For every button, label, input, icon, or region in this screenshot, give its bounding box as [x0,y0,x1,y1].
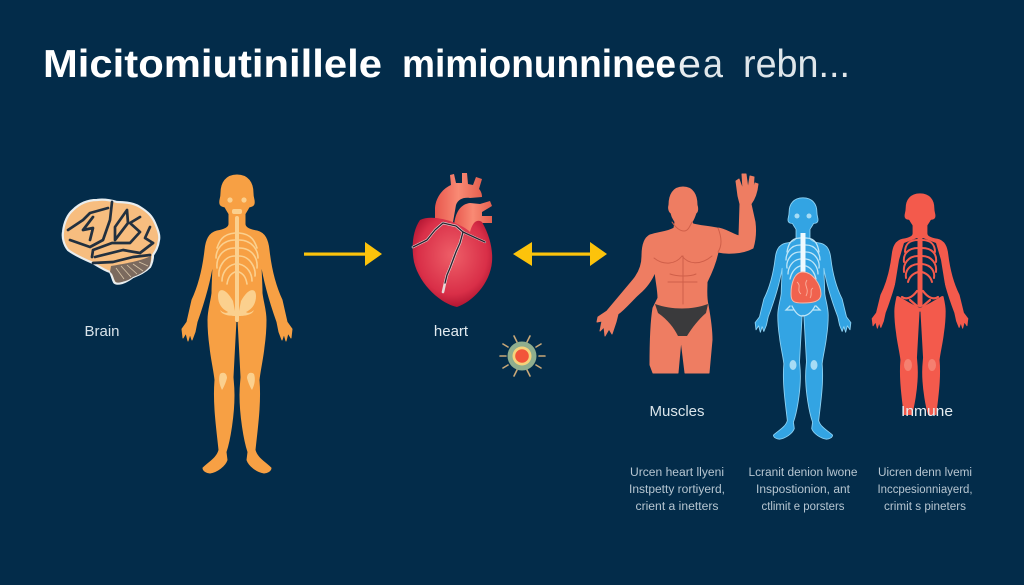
briefs [655,304,708,336]
title: e [678,43,701,86]
label: Brain: Brain [84,323,120,340]
figure: muscle man [597,174,758,373]
aorta [435,173,482,222]
label: heart: heart [434,323,469,340]
icon: brain [63,200,159,284]
blue ribs [786,238,820,316]
label: Muscles: Muscles [650,403,704,420]
text block: muscles description: Instpetty rortiyerd, [629,484,725,496]
orange skeleton [216,218,258,320]
text block: immune description: crimit s pineters [884,501,966,513]
label: Inmune: Inmune [901,403,953,420]
text block: muscles description [629,467,725,513]
cerebellum [110,256,151,283]
text block: blue figure description: ctlimit e porsters [762,501,845,513]
text block: muscles description: crient a inetters [636,501,719,513]
title: Micitomiutinillele [43,43,382,86]
text block: immune description: Uicren denn lvemi [878,467,972,479]
arrow: double [513,242,607,266]
text block: muscles description: Urcen heart llyeni [630,467,724,479]
icon: heart [413,173,492,307]
icon: cell sun [500,336,545,376]
title: mimionunninee [402,43,676,86]
arrow: right [304,242,382,266]
blue organ [791,272,821,303]
title: rebn... [743,43,850,86]
text block: immune description: Inccpesionniayerd, [878,484,972,496]
text block: blue figure description: Lcranit denion lwone [748,467,858,479]
figure: red body [872,194,968,435]
red skeleton [902,228,938,306]
text block: blue figure description [748,467,858,513]
figure: blue body [755,198,851,439]
text block: immune description [878,467,972,513]
title [43,43,850,86]
title: a [703,43,723,86]
text block: blue figure description: Inspostionion, ant [756,484,851,496]
red torso cutout [893,238,947,308]
pulmonary artery [454,201,492,240]
figure: orange skeleton body [182,175,292,473]
heart body [413,218,492,307]
